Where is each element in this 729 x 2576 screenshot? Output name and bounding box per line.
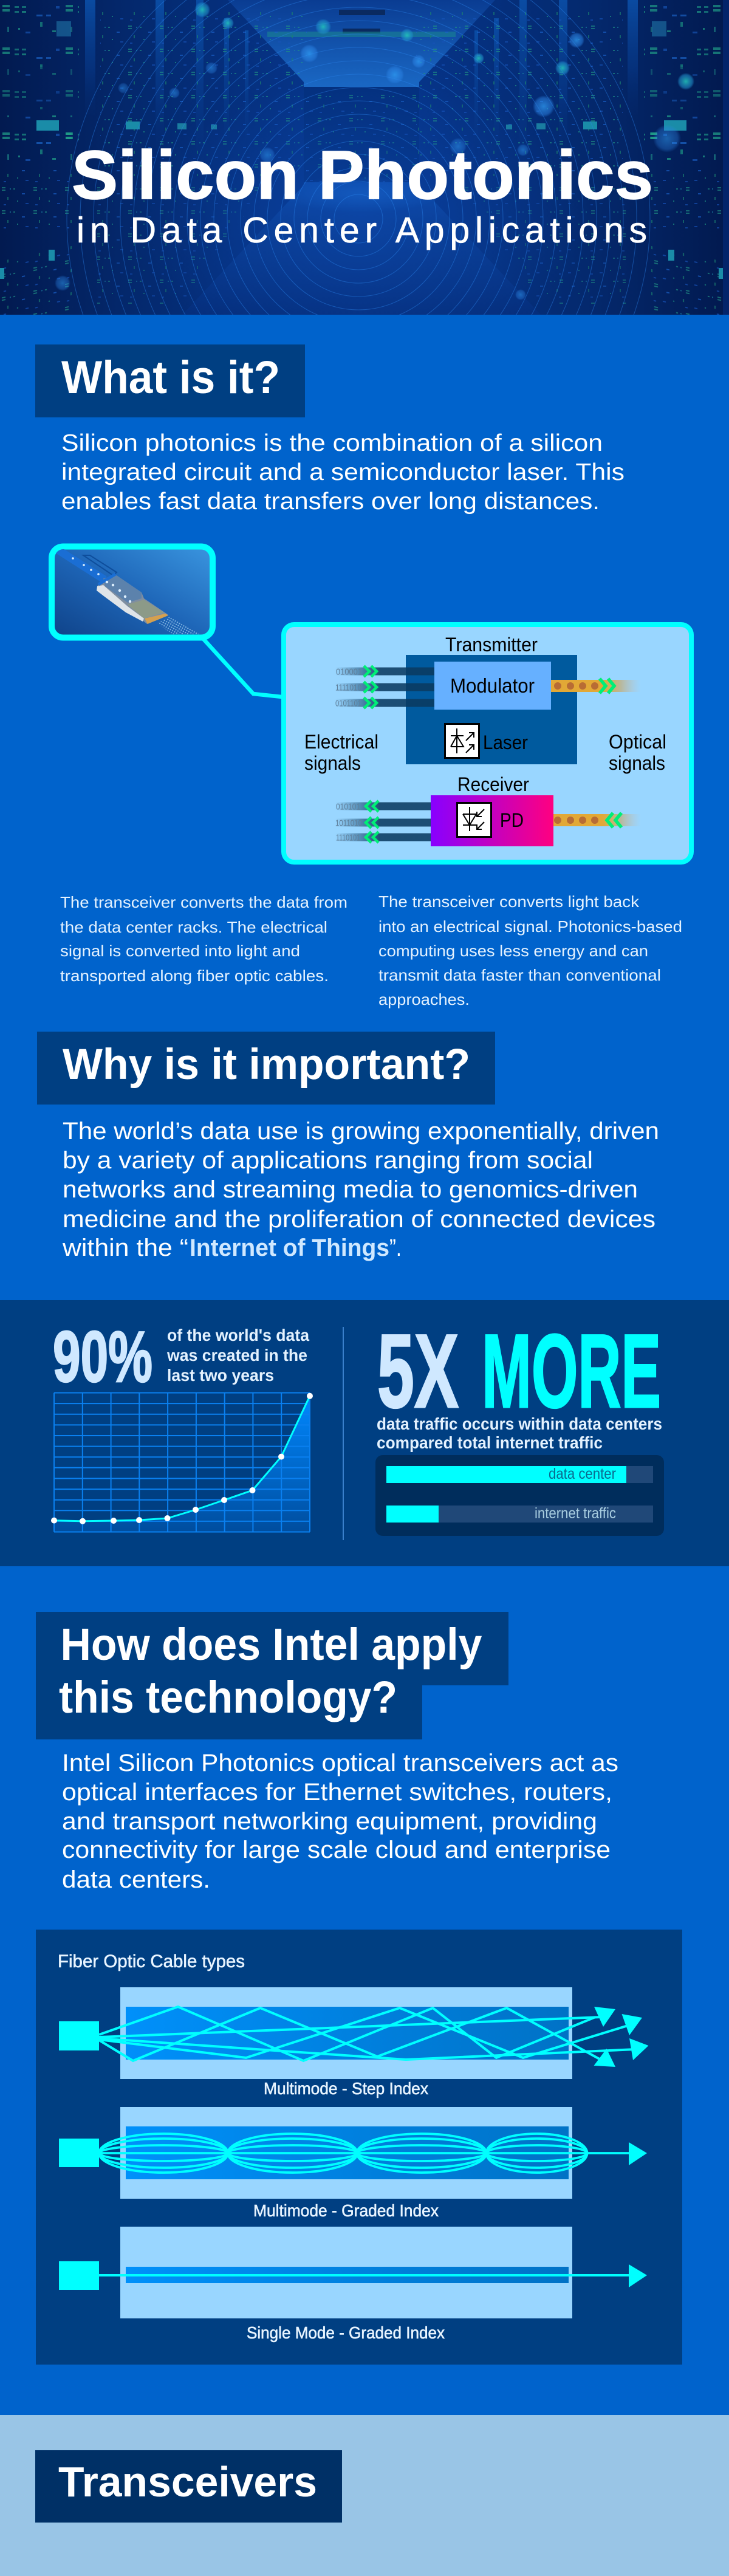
icon: fiber cable — [56, 549, 104, 580]
bar chart: data center vs internet traffic: internet traffic — [535, 1505, 616, 1522]
panel: fiber optic cable types — [36, 1930, 682, 2365]
text block: Intel transceivers: data centers. — [62, 1866, 210, 1893]
heading: What is it? — [35, 344, 305, 417]
text block: Intel transceivers: optical interfaces for Ethernet switches, routers, — [62, 1779, 612, 1806]
stat caption: was created in the — [166, 1346, 307, 1365]
panel: transceivers section: Transceivers — [58, 2458, 317, 2506]
stat caption — [166, 1326, 309, 1385]
bar chart: data center vs internet traffic: data center — [549, 1465, 616, 1482]
text block: transceiver converts light: into an electrical signal. Photonics-based — [378, 917, 682, 936]
bar chart: data center vs internet traffic — [375, 1455, 664, 1536]
text block: Intel transceivers: Intel Silicon Photonics optical transceivers act as — [62, 1750, 618, 1776]
label: Optical signals — [609, 731, 666, 774]
optical output signal — [551, 679, 641, 693]
icon: beam of data dots — [157, 617, 202, 634]
text block: transceiver converts light — [378, 892, 682, 1009]
heading: What is it?: What is it? — [61, 352, 280, 403]
electrical input signals — [335, 666, 434, 708]
text block: data growth — [62, 1118, 659, 1261]
central glow — [191, 120, 533, 315]
photo: optical transceiver module — [52, 547, 213, 638]
text block: transceiver converts light: computing uses less energy and can — [378, 942, 648, 960]
label: Optical signals: Optical — [609, 731, 666, 753]
electrical input signals: 1111010 — [335, 683, 361, 693]
heading: Transceivers — [35, 2450, 342, 2523]
text block: transceiver converts light: approaches. — [378, 990, 470, 1009]
electrical output signals: 1110101 — [336, 832, 360, 843]
optical input signal — [553, 813, 641, 827]
ceiling — [228, 0, 495, 87]
floor — [182, 182, 541, 315]
text block: Intel transceivers — [62, 1750, 618, 1893]
heading: How does Intel apply this technology?: this technology? — [59, 1672, 397, 1722]
panel: transceiver diagram — [284, 625, 691, 862]
text block: data growth: Internet of Things — [190, 1235, 389, 1261]
server racks left — [0, 0, 307, 333]
stat caption — [377, 1414, 662, 1452]
label: Optical signals: signals — [609, 752, 665, 774]
diagram: multimode graded index — [59, 2107, 647, 2199]
panel heading: Fiber Optic Cable types — [58, 1951, 245, 1971]
label: Single Mode - Graded Index: Single Mode - Graded Index — [247, 2323, 445, 2342]
arrow: connector from photo to diagram — [204, 639, 282, 697]
text block: transceiver converts data: transported along fiber optic cables. — [60, 967, 329, 985]
electrical output signals: 010101 — [336, 802, 360, 812]
photodiode block: PD — [500, 809, 524, 831]
text block: transceiver converts data — [60, 893, 347, 985]
text block: definition: integrated circuit and a semiconductor laser. This — [61, 459, 625, 485]
label: Electrical signals: Electrical — [304, 731, 378, 753]
data dots — [72, 557, 131, 603]
server racks right — [416, 0, 723, 333]
text block: data growth: networks and streaming media to genomics-driven — [63, 1176, 638, 1203]
heading: How does Intel apply this technology? — [36, 1612, 508, 1739]
label: Multimode - Graded Index: Multimode - Graded Index — [253, 2201, 439, 2220]
light particles — [55, 2, 694, 300]
label: Transmitter: Transmitter — [445, 634, 538, 656]
panel: statistics band — [0, 1300, 729, 1566]
text block: data growth: by a variety of applications ranging from social — [63, 1147, 593, 1174]
text block: data growth: medicine and the proliferation of connected devices — [63, 1206, 655, 1233]
photodiode block — [431, 795, 553, 846]
title: Silicon Photonics — [72, 137, 653, 213]
text block: transceiver converts light: The transceiver converts light back — [378, 892, 640, 911]
label: Multimode - Step Index: Multimode - Step Index — [264, 2079, 428, 2098]
hero: data center aisle background — [0, 0, 729, 315]
electrical input signals: 010001 — [336, 667, 362, 677]
text block: transceiver converts data: the data center racks. The electrical — [60, 918, 327, 936]
stat caption: last two years — [167, 1366, 274, 1385]
stat: 5X MORE: 5X — [377, 1313, 459, 1430]
modulator block — [434, 662, 551, 710]
heading: Why is it important?: Why is it important? — [63, 1041, 470, 1089]
text block: transceiver converts light: transmit data faster than conventional — [378, 966, 661, 984]
label: Receiver: Receiver — [457, 773, 529, 795]
stat caption: data traffic occurs within data centers — [377, 1414, 662, 1433]
text block: Intel transceivers: and transport networking equipment, providing — [62, 1808, 597, 1835]
label: Electrical signals — [304, 731, 378, 774]
diagram: single mode graded index — [59, 2227, 647, 2318]
text block: definition: enables fast data transfers over long distances. — [61, 488, 600, 515]
modulator block: Modulator — [450, 674, 535, 697]
text block: data growth: within the “ — [62, 1235, 188, 1261]
text block: data growth: The world’s data use is growing exponentially, driven — [63, 1118, 659, 1145]
icon: module housing — [97, 583, 168, 624]
transmitter box — [406, 655, 577, 764]
text block: definition — [61, 430, 625, 515]
electrical output signals — [335, 801, 431, 843]
line chart: data growth — [51, 1392, 313, 1532]
stat: 5X MORE — [377, 1313, 661, 1430]
text block: transceiver converts data: signal is converted into light and — [60, 942, 300, 960]
text block: data growth: ”. — [389, 1235, 402, 1261]
text block: transceiver converts data: The transceiver converts the data from — [60, 893, 347, 911]
text block: definition: Silicon photonics is the combination of a silicon — [61, 430, 603, 456]
label: Electrical signals: signals — [304, 752, 361, 774]
stat caption: compared total internet traffic — [377, 1433, 603, 1452]
back wall — [301, 87, 422, 184]
diagram: multimode step index — [59, 1987, 649, 2079]
electrical output signals: 1011010 — [335, 818, 362, 829]
panel: transceivers section — [0, 2415, 729, 2576]
heading: How does Intel apply this technology?: How does Intel apply — [61, 1619, 482, 1670]
stat caption: of the world's data — [167, 1326, 309, 1345]
label: Laser: Laser — [483, 731, 528, 753]
stat: 90%: 90% — [53, 1317, 152, 1397]
icon: laser diode — [445, 724, 479, 758]
text block: Intel transceivers: connectivity for large scale cloud and enterprise — [62, 1837, 611, 1863]
heading: Why is it important? — [37, 1032, 495, 1105]
concentric rings — [67, 0, 650, 315]
subtitle: in Data Center Applications — [77, 210, 647, 250]
electrical input signals: 0101101 — [335, 699, 361, 708]
